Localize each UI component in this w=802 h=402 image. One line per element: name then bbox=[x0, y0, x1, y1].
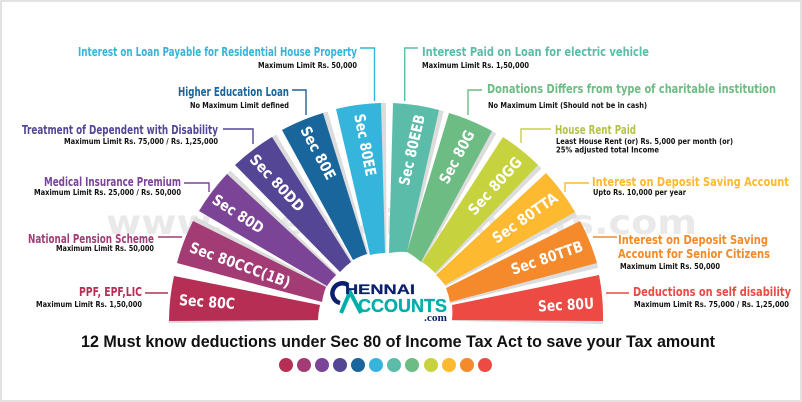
logo: Chennai Accounts: .com bbox=[424, 313, 448, 324]
segment: Sec 80TTB: Sec 80TTB bbox=[509, 237, 585, 279]
segment: Sec 80TTA bbox=[436, 173, 578, 289]
logo: Chennai Accounts: CCOUNTS bbox=[358, 295, 447, 316]
callout: 80U bbox=[606, 284, 791, 309]
segment: Sec 80TTA: Sec 80TTA bbox=[489, 189, 562, 247]
callout: 80EEB: Maximum Limit Rs. 1,50,000 bbox=[422, 61, 529, 70]
segment: Sec 80EEB: Sec 80EEB bbox=[395, 113, 429, 187]
callout: 80TTA: Upto Rs. 10,000 per year bbox=[593, 188, 686, 197]
callout: 80CCC: National Pension Scheme bbox=[28, 231, 154, 246]
callout: 80D: Maximum Limit Rs. 25,000 / Rs. 50,000 bbox=[34, 188, 181, 197]
callout: 80G bbox=[468, 81, 776, 115]
callout: 80E bbox=[178, 84, 306, 115]
callout: 80C: Maximum Limit Rs. 1,50,000 bbox=[36, 300, 142, 309]
callout: 80GG: Least House Rent (or) Rs. 5,000 per month (or) bbox=[556, 137, 733, 146]
callout: 80G: No Maximum Limit (Should not be in cash) bbox=[488, 101, 647, 110]
callout: 80C: PPF, EPF,LIC bbox=[79, 284, 142, 299]
callout: 80EE: Interest on Loan Payable for Residential House Property bbox=[78, 44, 357, 59]
segment: Sec 80DD bbox=[235, 134, 355, 272]
callout: 80EEB: Interest Paid on Loan for electric vehicle bbox=[422, 44, 649, 59]
callout: 80TTB bbox=[593, 232, 770, 271]
callout: 80C bbox=[36, 284, 168, 309]
logo: Chennai Accounts: HENNAI bbox=[345, 281, 415, 297]
segment: Sec 80EEB bbox=[389, 103, 444, 254]
segment: Sec 80U bbox=[452, 275, 604, 324]
callout: 80TTA bbox=[565, 174, 789, 197]
callout: 80DD bbox=[22, 122, 253, 146]
callout: 80EE: Maximum Limit Rs. 50,000 bbox=[258, 61, 357, 70]
callout: 80D bbox=[34, 174, 209, 197]
callout: 80GG: House Rent Paid bbox=[555, 122, 636, 137]
segment: Sec 80CCC(1B) bbox=[177, 216, 328, 302]
callout: 80TTB: Interest on Deposit Saving bbox=[618, 232, 768, 247]
callout: 80EEB bbox=[405, 44, 649, 101]
callout: 80D: Medical Insurance Premium bbox=[44, 174, 181, 189]
callout: 80CCC: Maximum Limit Rs. 50,000 bbox=[56, 244, 154, 253]
title: 12 Must know deductions under Sec 80 of Income Tax Act to save your Tax amount bbox=[81, 332, 715, 351]
segment: Sec 80CCC(1B): Sec 80CCC(1B) bbox=[187, 238, 293, 292]
watermark: www.ChennaiAccounts.com bbox=[106, 203, 697, 243]
segment: Sec 80GG bbox=[422, 137, 542, 276]
segment: Sec 80C bbox=[169, 276, 320, 323]
callout: 80GG: 25% adjusted total Income bbox=[556, 146, 659, 154]
callout: 80DD: Maximum Limit Rs. 75,000 / Rs. 1,25,000 bbox=[64, 137, 218, 146]
segment: Sec 80EE: Sec 80EE bbox=[350, 112, 380, 178]
segment: Sec 80TTB bbox=[446, 221, 599, 307]
callout: 80EE bbox=[78, 44, 374, 101]
colour dots row bbox=[279, 358, 492, 372]
callout: 80E: No Maximum Limit defined bbox=[190, 101, 289, 110]
segment: Sec 80E bbox=[282, 111, 372, 260]
segment: Sec 80DD: Sec 80DD bbox=[246, 151, 308, 215]
segment: Sec 80U: Sec 80U bbox=[538, 295, 594, 315]
callout: 80DD: Treatment of Dependent with Disability bbox=[22, 122, 218, 137]
segment: Sec 80EE bbox=[336, 102, 390, 255]
segment: Sec 80GG: Sec 80GG bbox=[464, 153, 526, 219]
callout: 80TTB: Maximum Limit Rs. 50,000 bbox=[620, 262, 720, 271]
segment: Sec 80D: Sec 80D bbox=[209, 191, 267, 237]
callout: 80GG bbox=[521, 122, 733, 154]
segment: Sec 80G bbox=[407, 113, 497, 264]
callout: 80CCC bbox=[28, 231, 182, 253]
logo: Chennai Accounts bbox=[332, 281, 448, 324]
segment: Sec 80D bbox=[199, 170, 339, 286]
callout: 80E: Higher Education Loan bbox=[178, 84, 289, 99]
segment: Sec 80C: Sec 80C bbox=[178, 291, 236, 313]
segment: Sec 80G: Sec 80G bbox=[435, 127, 479, 187]
segment: Sec 80E: Sec 80E bbox=[296, 123, 340, 183]
